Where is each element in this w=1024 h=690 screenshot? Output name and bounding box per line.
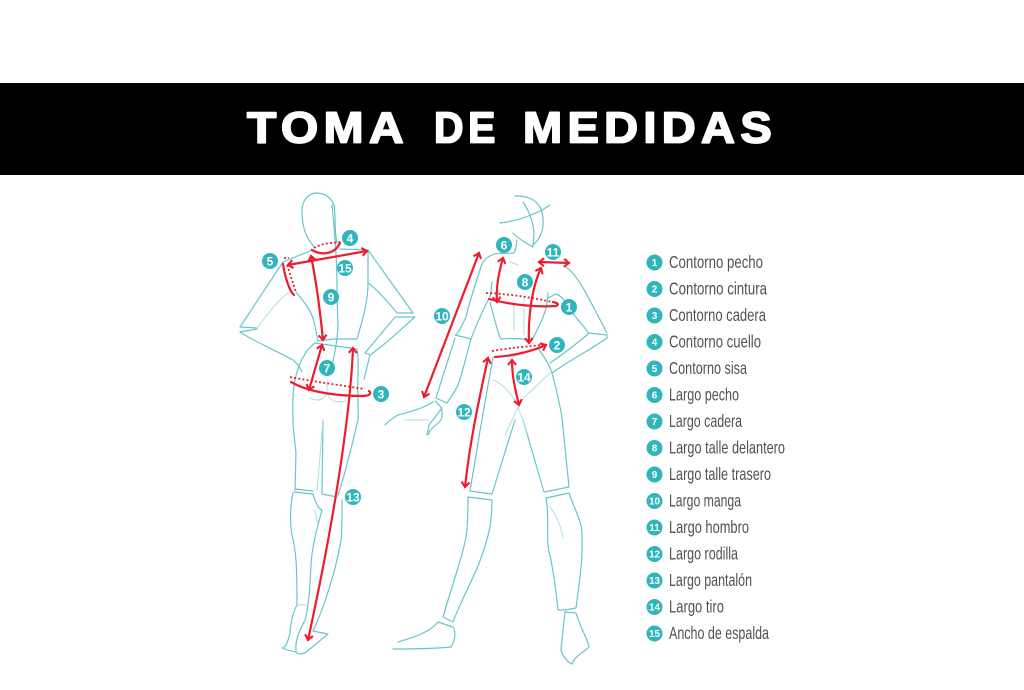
- number badges on figures: 1: [566, 300, 573, 314]
- legend: Largo talle delantero: [669, 438, 785, 458]
- title banner: DE: [434, 104, 500, 152]
- legend: 9: [652, 470, 658, 481]
- legend: 1: [652, 258, 658, 269]
- title banner: TOMA: [247, 104, 409, 152]
- legend: Largo pantalón: [669, 570, 752, 590]
- measurement arrows: front view: [424, 253, 569, 487]
- legend: Ancho de espalda: [669, 623, 769, 643]
- legend: Largo manga: [669, 490, 741, 510]
- legend: Contorno cuello: [669, 332, 761, 352]
- legend: Largo rodilla: [669, 544, 738, 564]
- number badges on figures: 9: [328, 290, 335, 304]
- number badges on figures: 8: [522, 275, 529, 289]
- legend: 3: [652, 311, 658, 322]
- number badges on figures: 7: [324, 361, 331, 375]
- legend: Largo tiro: [669, 596, 724, 616]
- legend: Largo cadera: [669, 411, 742, 431]
- legend: [646, 252, 785, 643]
- number badges on figures: [262, 230, 577, 505]
- legend: 12: [649, 550, 660, 560]
- legend: 2: [652, 284, 658, 296]
- number badges on figures: 13: [346, 490, 360, 504]
- legend: 4: [652, 338, 658, 348]
- legend: 6: [652, 390, 658, 402]
- number badges on figures: 12: [457, 405, 471, 419]
- number badges on figures: 11: [547, 245, 560, 259]
- legend: Largo talle trasero: [669, 464, 771, 484]
- number badges on figures: 3: [378, 387, 385, 401]
- legend: 10: [649, 496, 660, 508]
- legend: 15: [649, 629, 660, 640]
- number badges on figures: 6: [501, 238, 508, 252]
- legend: 11: [649, 523, 660, 534]
- legend: Largo hombro: [669, 517, 749, 537]
- number badges on figures: 10: [435, 309, 449, 323]
- measurement arrows: back view: [283, 242, 370, 640]
- number badges on figures: 4: [347, 231, 354, 245]
- title banner: MEDIDAS: [523, 104, 777, 152]
- back view figure outline: [240, 193, 415, 654]
- legend: Largo pecho: [669, 384, 739, 404]
- number badges on figures: 15: [338, 261, 352, 275]
- number badges on figures: 2: [554, 338, 561, 352]
- legend: Contorno sisa: [669, 358, 747, 378]
- number badges on figures: 5: [267, 254, 274, 268]
- legend: Contorno cintura: [669, 278, 767, 298]
- number badges on figures: 14: [517, 370, 531, 384]
- legend: Contorno cadera: [669, 305, 766, 325]
- legend: 13: [649, 576, 660, 587]
- legend: 14: [649, 602, 660, 614]
- title banner: [0, 83, 1024, 175]
- legend: 5: [652, 364, 658, 375]
- front view figure outline: [385, 196, 607, 664]
- legend: 8: [652, 444, 658, 454]
- legend: Contorno pecho: [669, 252, 763, 272]
- legend: 7: [652, 417, 658, 428]
